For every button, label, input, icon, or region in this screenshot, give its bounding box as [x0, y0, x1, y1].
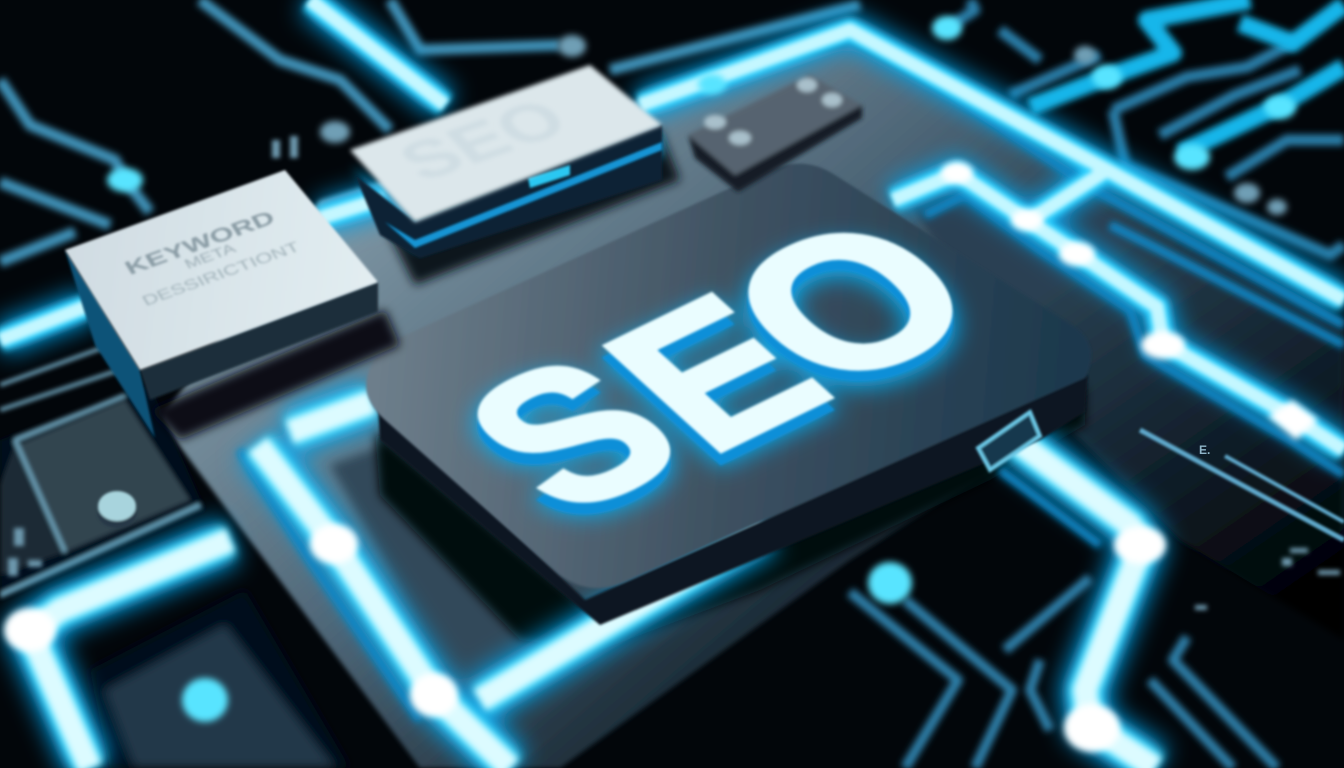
chip drop shadow [150, 310, 400, 440]
chip side wall [378, 375, 1088, 625]
letters white face [414, 176, 1030, 550]
label: etched E: E. [1199, 443, 1210, 457]
letters blue extrusion [414, 186, 1030, 562]
shadow under main chip [375, 385, 1085, 650]
recess inside lower glowing trace [330, 445, 590, 690]
chip connector [978, 412, 1040, 470]
chip blue stripe [385, 142, 662, 248]
chip top face [366, 164, 1091, 588]
secondary blue trace edges [240, 60, 1344, 720]
dim traces: bottom right [850, 578, 1277, 768]
small etched marks [8, 136, 1340, 610]
SEO small chip [350, 65, 680, 285]
thick traces mid glow [30, 402, 1155, 768]
thick traces bright core [30, 402, 1155, 768]
chip top [65, 170, 378, 370]
main SEO chip [366, 164, 1091, 625]
thin traces bright core [0, 0, 1344, 450]
letters blue extrusion: O [672, 186, 1030, 437]
glow: thin traces outer halo [0, 0, 1344, 450]
dim traces: top left [0, 0, 860, 262]
panel: lower left grey inset [0, 345, 205, 600]
chip blue edge glow [352, 135, 662, 250]
keyword chip [65, 170, 400, 440]
chip lit tab [528, 165, 570, 188]
keyword label: KEYWORD [121, 208, 279, 279]
letters soft glow: O [672, 189, 1030, 440]
dim pads [320, 35, 1287, 215]
chip top [688, 75, 862, 175]
letters blue extrusion: S [414, 329, 731, 562]
chip label: SEO [385, 88, 582, 192]
letters white face: O [672, 176, 1030, 427]
dim traces: top right [947, 0, 1344, 255]
letters soft glow [414, 189, 1030, 560]
glow: thick traces outer halo [30, 402, 1155, 768]
cyan traces: top right [1030, 0, 1344, 153]
chip drop shadow [385, 130, 680, 285]
letters soft glow: S [414, 327, 731, 560]
chip top [350, 65, 662, 222]
thin etched lines: right panel [1140, 430, 1344, 540]
chip side [355, 125, 662, 258]
component: small pad chip on inset [97, 491, 137, 528]
chip front side [140, 282, 378, 400]
letters soft glow: E [557, 266, 874, 499]
chip side [688, 105, 862, 192]
letters white face: S [414, 317, 731, 550]
description label: DESSIRICTIONT [139, 239, 303, 309]
panel: lower left dark inset [90, 590, 350, 768]
chip left side [65, 250, 155, 438]
right dark panel [900, 190, 1344, 640]
chip contacts [704, 78, 842, 145]
small contact chip [688, 75, 862, 192]
letters blue extrusion: E [557, 268, 874, 501]
thin traces mid glow [0, 0, 1344, 450]
meta label: META [181, 240, 239, 272]
chip text block [121, 208, 303, 309]
glowing nodes [4, 162, 1318, 752]
letters white face: E [557, 256, 874, 489]
